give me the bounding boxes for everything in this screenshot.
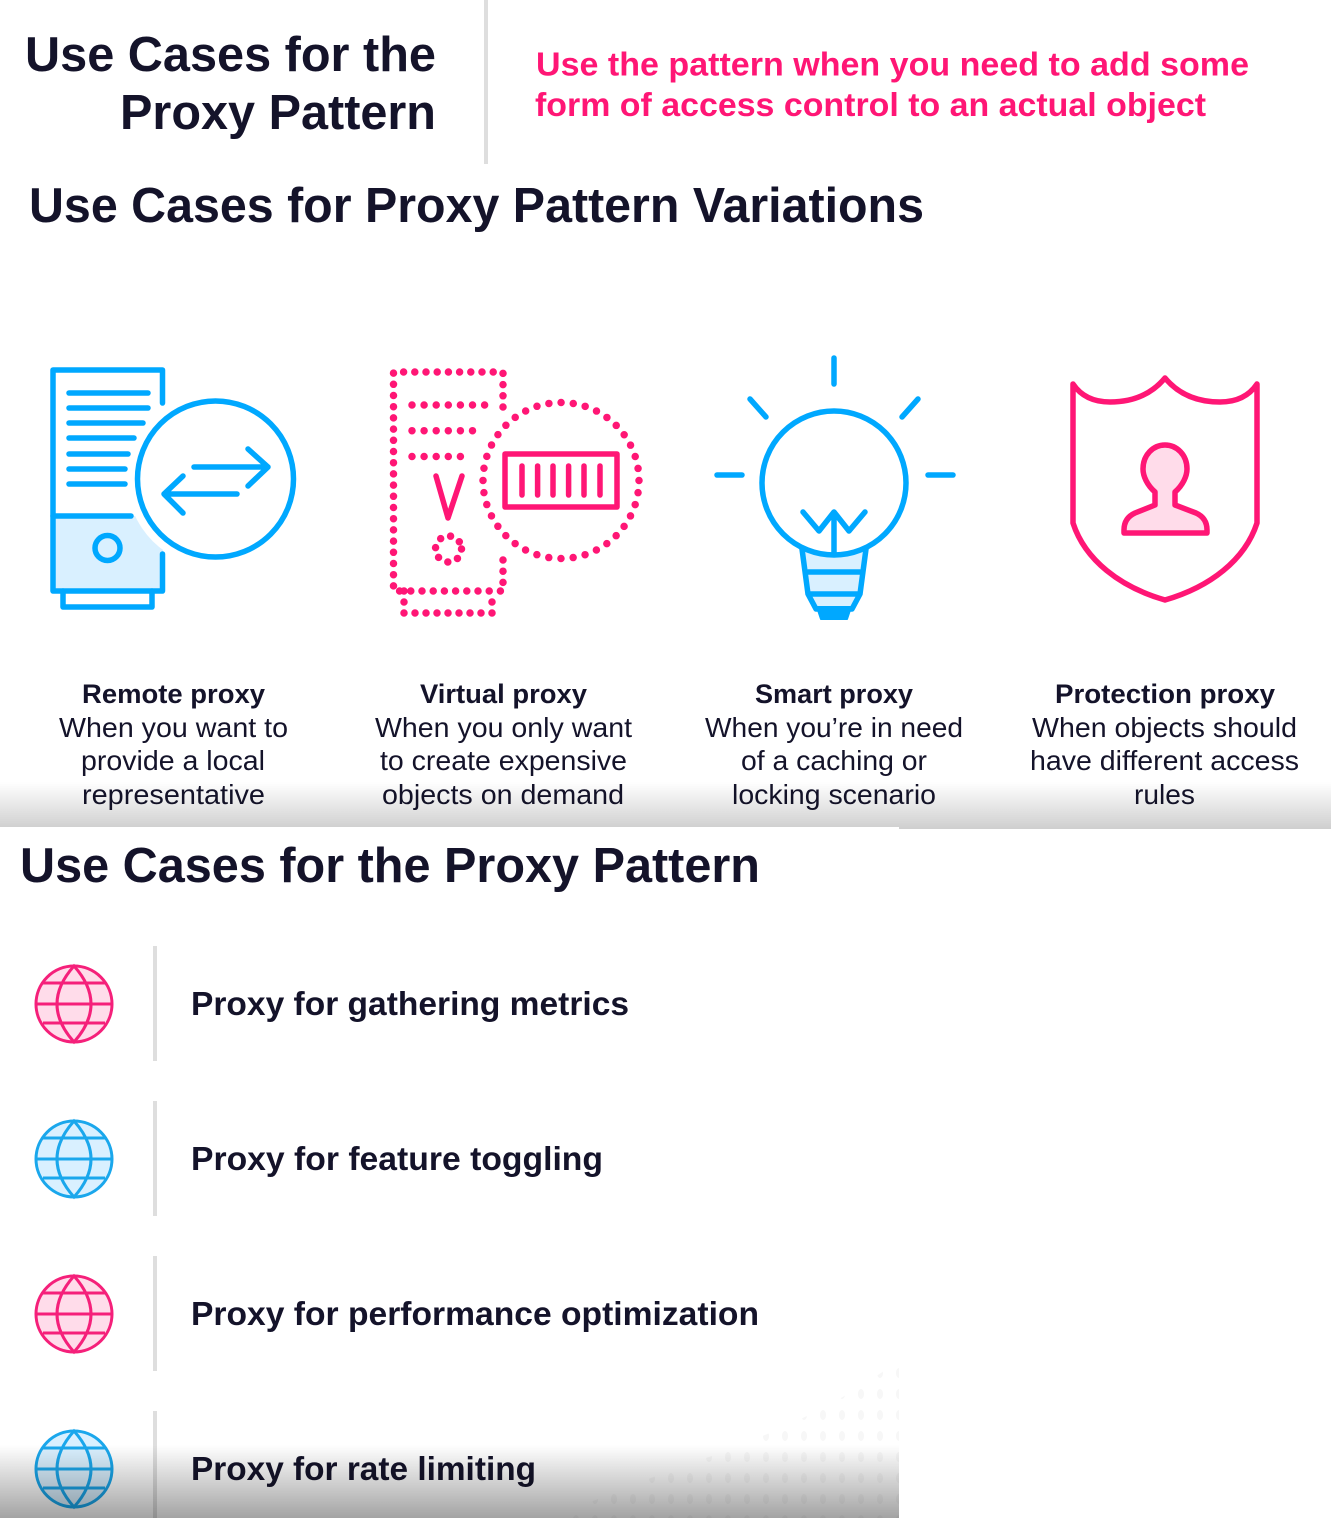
text block: smart proxy: When you’re in need (705, 712, 963, 743)
icon: protection proxy shield (1073, 378, 1257, 600)
text block: remote proxy (59, 679, 288, 810)
text block: protection proxy (1030, 679, 1299, 810)
list item: performance optimization: Proxy for performance optimization (191, 1295, 759, 1332)
text block: remote proxy: representative (82, 779, 265, 810)
list item: rate limiting (36, 1411, 536, 1518)
list item: rate limiting: Proxy for rate limiting (191, 1450, 536, 1487)
text block: virtual proxy (375, 679, 632, 810)
list item: gathering metrics (36, 946, 629, 1061)
text block: virtual proxy: to create expensive (380, 745, 627, 776)
callout: access control statement (535, 46, 1249, 123)
text block: protection proxy: Protection proxy (1055, 679, 1275, 709)
icon: pink globe (36, 966, 112, 1042)
callout: access control statement: form of access control to an actual object (535, 86, 1206, 123)
header divider (484, 0, 488, 164)
shaded band: bottom of variations panel (0, 782, 1331, 829)
text block: protection proxy: have different access (1030, 745, 1299, 776)
icon: blue globe (36, 1121, 112, 1197)
heading: variations: Use Cases for Proxy Pattern Variations (29, 179, 924, 233)
icon: smart proxy light bulb (717, 358, 953, 619)
icon: remote proxy server (53, 370, 303, 607)
list item: feature toggling: Proxy for feature toggling (191, 1140, 603, 1177)
text block: remote proxy: provide a local (81, 745, 265, 776)
text block: smart proxy: locking scenario (732, 779, 936, 810)
icon: blue globe (36, 1431, 112, 1507)
text block: remote proxy: When you want to (59, 712, 288, 743)
background dot texture (560, 1360, 899, 1518)
heading: use cases list: Use Cases for the Proxy Pattern (20, 839, 760, 893)
text block: smart proxy (705, 679, 963, 810)
icon: virtual proxy dotted server (394, 372, 639, 613)
text block: smart proxy: of a caching or (741, 745, 927, 776)
title: Use Cases for the Proxy Pattern: Use Cases for the (25, 28, 436, 82)
shaded band: bottom of list panel (0, 1445, 899, 1518)
title: Use Cases for the Proxy Pattern: Proxy Pattern (120, 86, 436, 140)
text block: virtual proxy: When you only want (375, 712, 632, 743)
list item: performance optimization (36, 1256, 759, 1371)
list item: feature toggling (36, 1101, 603, 1216)
text block: virtual proxy: objects on demand (382, 779, 624, 810)
text block: remote proxy: Remote proxy (82, 679, 265, 709)
list item: gathering metrics: Proxy for gathering metrics (191, 985, 629, 1022)
text block: smart proxy: Smart proxy (755, 679, 913, 709)
callout: access control statement: Use the pattern when you need to add some (536, 46, 1249, 82)
text block: virtual proxy: Virtual proxy (420, 679, 587, 709)
text block: protection proxy: rules (1134, 779, 1195, 810)
title: Use Cases for the Proxy Pattern (25, 28, 436, 140)
icon: pink globe (36, 1276, 112, 1352)
text block: protection proxy: When objects should (1032, 712, 1297, 743)
